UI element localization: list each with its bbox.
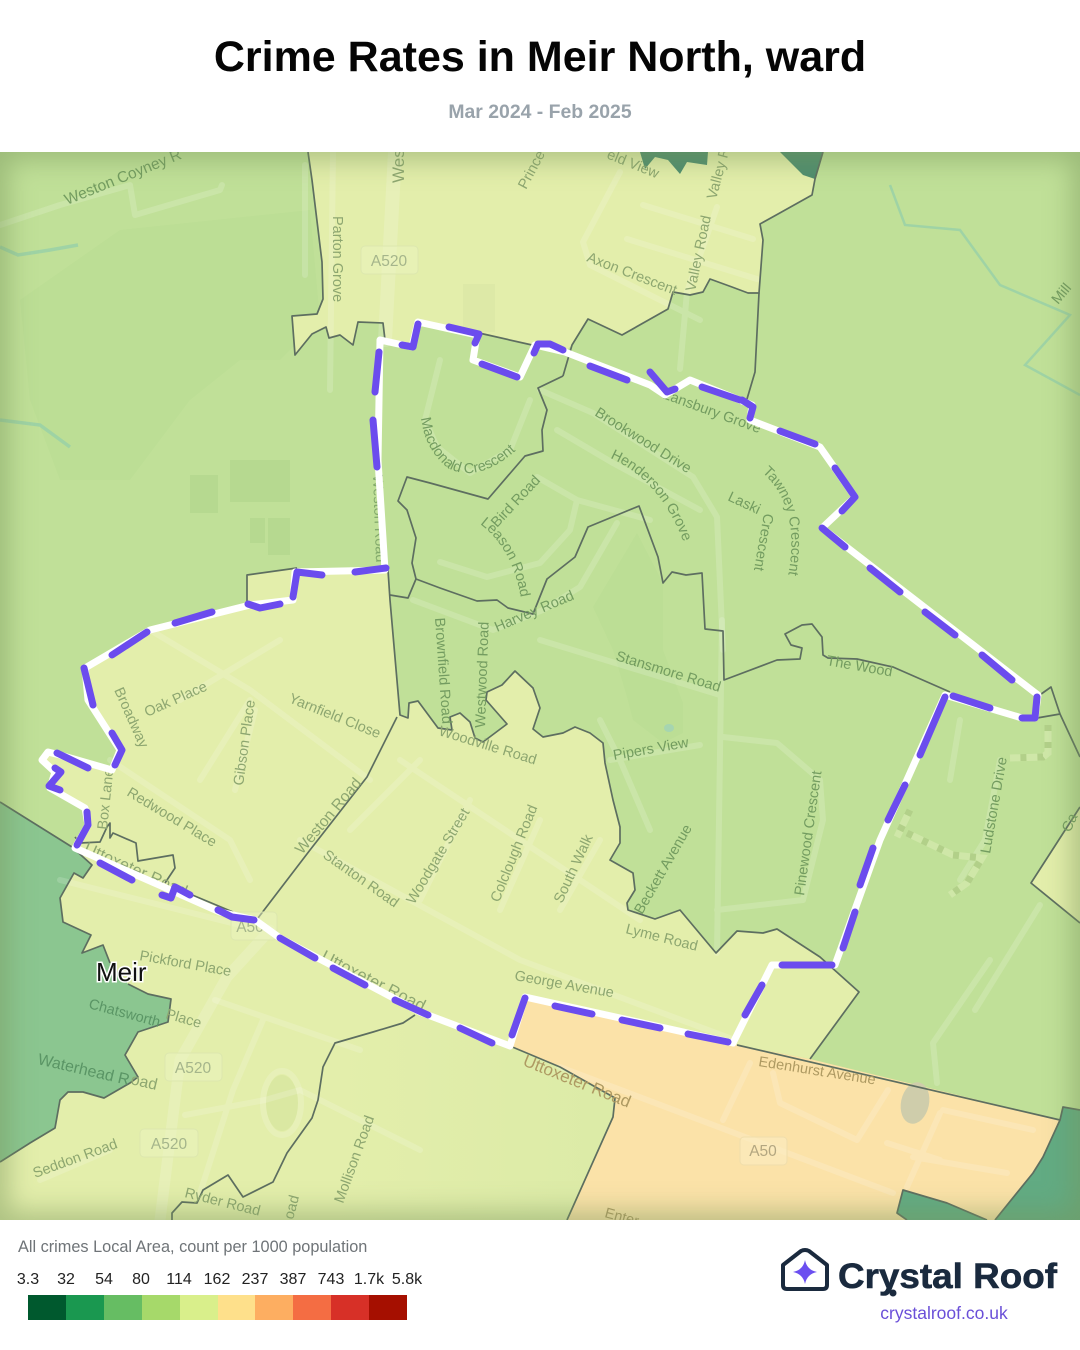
- road shields: A50: [236, 919, 264, 936]
- woodland shading: [20, 210, 683, 743]
- road name labels on yellow areas: Parton Grove: [329, 216, 345, 302]
- area boundary lines: [0, 152, 1080, 1220]
- road name labels on green areas: Weston Road: [369, 475, 388, 563]
- road name labels on green areas: Bird Road: [488, 473, 544, 531]
- road name labels on yellow areas: Pickford Place: [138, 948, 232, 980]
- footpath track: [897, 725, 1048, 895]
- choropleth map: [0, 152, 1080, 1220]
- road name labels on yellow areas: Axon Crescent: [585, 250, 679, 299]
- road name labels on green areas: [46, 152, 1080, 950]
- road name labels on green areas: Brownfield Road: [431, 617, 454, 724]
- date range subtitle: Mar 2024 - Feb 2025: [448, 101, 632, 123]
- road name labels on yellow areas: George Avenue: [513, 968, 615, 1001]
- legend scale numbers: 54: [95, 1271, 113, 1288]
- legend scale numbers: 1.7k: [354, 1271, 384, 1288]
- legend scale numbers: 387: [280, 1271, 306, 1288]
- road name labels on yellow areas: Valley Road: [683, 214, 715, 293]
- road name labels on yellow areas: Broadway: [110, 685, 151, 751]
- road name labels on green areas: Tawney Crescent: [764, 465, 800, 576]
- road name labels on dark green area: Waterhead R: [36, 1051, 131, 1089]
- road name labels on yellow areas: Weston Road: [292, 775, 365, 858]
- road shields: A520: [175, 1060, 211, 1077]
- website url: crystalroof.co.uk: [880, 1303, 1008, 1323]
- map base: green areas: [0, 152, 1080, 1220]
- road name labels on green areas: Harvey Road: [492, 588, 576, 636]
- legend scale numbers: 162: [204, 1271, 230, 1288]
- legend scale numbers: 114: [166, 1271, 192, 1288]
- area: dark teal patches at top: [640, 152, 823, 179]
- area: darker green western zone: [0, 802, 171, 1162]
- ward boundary: white underlay: [42, 322, 1038, 1046]
- legend scale numbers: 3.3: [17, 1271, 39, 1288]
- road name labels on green areas: The Wood: [825, 653, 894, 681]
- park patches: [190, 284, 933, 1131]
- area: eastern yellow wedge: [1031, 807, 1080, 923]
- legend scale numbers: 32: [57, 1271, 75, 1288]
- road name labels on green areas: Mill: [1049, 281, 1075, 308]
- legend scale numbers: 743: [318, 1271, 344, 1288]
- area: lower centre pale zone: [172, 1015, 615, 1220]
- road name labels on yellow areas: Woodville Road: [437, 724, 538, 768]
- legend scale numbers: 5.8k: [392, 1271, 422, 1288]
- road network: [0, 152, 1040, 1220]
- title: Crime Rates in Meir North, ward: [214, 33, 866, 81]
- legend colour bar: [28, 1295, 407, 1320]
- road name labels on green areas: Crescent: [750, 512, 776, 572]
- road name labels on green areas: Lansbury Grove: [661, 387, 763, 437]
- logo: Crystal Roof: [781, 1248, 1058, 1296]
- area: south-western yellow-green zone: [0, 568, 859, 1220]
- road name labels on orange area: [521, 1051, 877, 1230]
- road name labels on yellow areas: Mollison Road: [332, 1114, 378, 1205]
- road shields: [140, 246, 787, 1165]
- road shields: A520: [151, 1136, 187, 1153]
- icon: house with star: [783, 1250, 827, 1289]
- road name labels on yellow areas: Uttoxeter Road: [318, 947, 429, 1015]
- road name labels on green areas: Stansmore Road: [614, 649, 723, 696]
- road name labels on green areas: Ludstone Drive: [978, 756, 1011, 855]
- road name labels on green areas: Leason Road: [481, 517, 531, 596]
- area: northern yellow-green zone: [292, 152, 823, 355]
- road name labels on green areas: Macdonald Crescent: [421, 417, 516, 474]
- road name labels on dark green area: Chatsworth: [87, 996, 162, 1031]
- legend scale numbers: 80: [132, 1271, 150, 1288]
- road name labels on yellow areas: Ryder Road: [183, 1185, 262, 1220]
- road name labels on green areas: Henderson Grove: [611, 450, 690, 540]
- road name labels on orange area: Uttoxeter Road: [521, 1051, 634, 1112]
- area: darker green southern patch: [897, 1190, 987, 1220]
- road shields: A520: [371, 253, 407, 270]
- area: darker green south-eastern zone: [995, 1107, 1080, 1220]
- area: orange higher-crime zone: [510, 997, 1060, 1220]
- legend title: All crimes Local Area, count per 1000 population: [18, 1238, 367, 1256]
- road name labels on yellow areas: Redwood Place: [124, 785, 219, 851]
- road name labels on yellow areas: oad: [129, 1071, 159, 1094]
- road name labels on orange area: Edenhurst Avenue: [757, 1054, 877, 1088]
- ward boundary: purple dashes: [49, 324, 1037, 1043]
- road name labels on yellow areas: Uttoxeter Road: [81, 839, 190, 901]
- road name labels on yellow areas: South Walk: [551, 832, 597, 906]
- road name labels on yellow areas: Yarnfield Close: [287, 691, 383, 742]
- road name labels on yellow areas: Colclough Road: [488, 803, 541, 904]
- road name labels on green areas: Pipers View: [612, 735, 690, 764]
- road name labels on green areas: Pinewood Crescent: [792, 770, 825, 897]
- legend scale numbers: [17, 1271, 422, 1288]
- road name labels on yellow areas: Stanton Road: [320, 847, 402, 911]
- road name labels on green areas: Westwood Road: [473, 622, 493, 728]
- road name labels on green areas: Brookwood Drive: [592, 405, 694, 477]
- road name labels on yellow areas: Woodgate Street: [404, 806, 473, 907]
- road name labels on green areas: Beckett Avenue: [632, 822, 696, 917]
- road name labels on yellow areas: Lyme Road: [624, 921, 699, 955]
- water streams: [0, 185, 1080, 447]
- map edge vignette: [0, 152, 1080, 1220]
- legend scale numbers: 237: [242, 1271, 268, 1288]
- road name labels on yellow areas: Oak Place: [142, 679, 210, 721]
- road name labels on yellow areas: [31, 146, 734, 1221]
- road name labels on yellow areas: Place: [164, 1006, 203, 1032]
- road name labels on yellow areas: Box Lane: [95, 768, 117, 830]
- road shields: A50: [749, 1143, 777, 1160]
- road name labels on yellow areas: Gibson Place: [231, 699, 259, 787]
- road name labels on dark green area: [36, 996, 162, 1089]
- road name labels on yellow areas: Seddon Road: [31, 1136, 120, 1182]
- place label: Meir: Meir: [96, 957, 147, 987]
- road name labels on green areas: Laski: [725, 489, 763, 518]
- logo wordmark: Crystal Roof: [838, 1257, 1057, 1296]
